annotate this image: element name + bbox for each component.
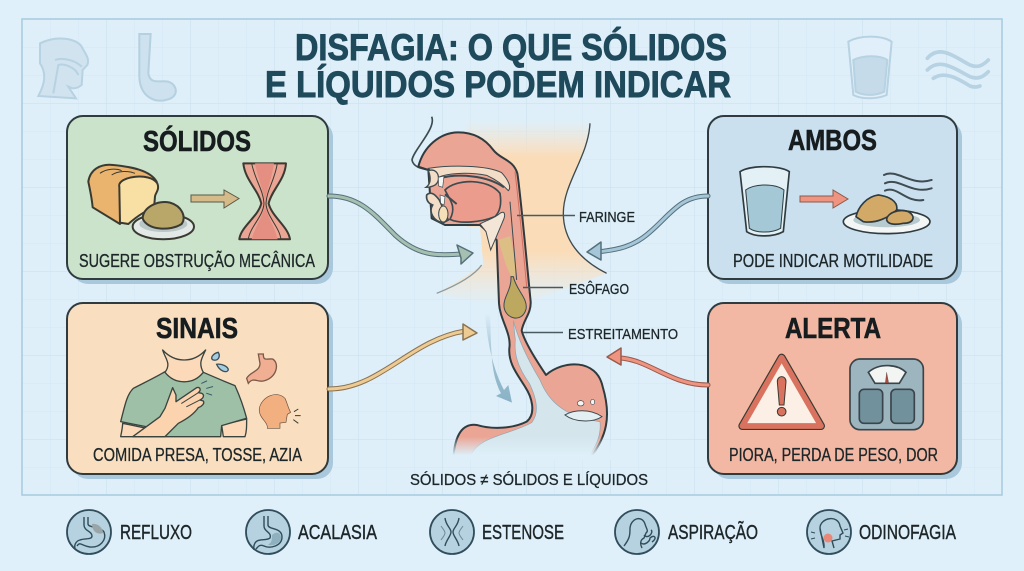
icon: person with hand on chest	[121, 350, 247, 437]
icon: coughing head	[259, 395, 301, 428]
icon: warning triangle	[742, 358, 821, 426]
icon: arrow	[800, 190, 848, 208]
icon: dilated stomach	[246, 510, 290, 554]
icon: narrowing	[239, 163, 290, 239]
bottom item: odinofagia	[807, 510, 957, 554]
heading: sinais: SINAIS	[156, 313, 238, 345]
bottom item: aspiração	[615, 510, 758, 554]
caption: alerta: PIORA, PERDA DE PESO, DOR	[729, 445, 938, 465]
leader line: esôfago	[523, 286, 563, 288]
label: aspiração: ASPIRAÇÃO	[668, 520, 758, 544]
icon: sweat drops	[212, 352, 228, 372]
stomach liquid surface	[565, 411, 602, 421]
bottom item: acalasia	[246, 510, 378, 554]
heading: sólidos: SÓLIDOS	[143, 124, 251, 158]
arrow: sinais to esophagus	[329, 324, 477, 389]
leader line: faringe	[517, 214, 575, 216]
icon: head with aspiration	[615, 510, 659, 554]
upper lip	[426, 170, 438, 187]
icon: glass of water	[740, 167, 789, 236]
anatomy illustration	[412, 117, 617, 460]
tongue	[445, 182, 501, 222]
title: E LÍQUIDOS PODEM INDICAR	[265, 64, 731, 105]
icon: head with painful throat	[807, 510, 851, 554]
icon: odor waves	[884, 173, 932, 200]
label: estenose: ESTENOSE	[482, 522, 564, 544]
title	[265, 26, 731, 105]
decorative icon: waves	[927, 52, 988, 87]
icon: plate with food	[843, 195, 930, 234]
icon: stomach with reflux	[67, 510, 111, 554]
label: acalasia: ACALASIA	[298, 522, 378, 544]
palate	[428, 166, 510, 191]
title: DISFAGIA: O QUE SÓLIDOS	[295, 26, 727, 68]
label: esôfago: ESÔFAGO	[569, 281, 629, 298]
icon: stomach	[247, 354, 276, 383]
arrow: alerta to esophagus	[607, 348, 708, 385]
icon: bread	[88, 165, 158, 224]
label: odinofagia: ODINOFAGIA	[859, 522, 957, 544]
caption: sinais: COMIDA PRESA, TOSSE, AZIA	[93, 445, 302, 465]
lips and chin	[427, 193, 448, 223]
teeth	[438, 176, 445, 205]
heading: alerta: ALERTA	[785, 313, 881, 345]
decorative icon: head profile	[38, 39, 88, 98]
decorative icon: glass of water	[848, 37, 892, 98]
icon: plate with food	[133, 202, 194, 239]
bottom item: estenose	[430, 510, 564, 554]
panel: sinais	[67, 303, 333, 479]
tube: pharynx, esophagus and stomach	[418, 132, 607, 458]
caption: sólidos vs sólidos e líquidos: SÓLIDOS ≠ SÓLIDOS E LÍQUIDOS	[410, 470, 648, 489]
label: estreitamento: ESTREITAMENTO	[568, 326, 678, 343]
arrow: ambos to esophagus	[587, 196, 708, 260]
caption: ambos: PODE INDICAR MOTILIDADE	[733, 251, 933, 271]
decorative icon: esophagus and stomach	[139, 34, 176, 101]
caption: sólidos: SUGERE OBSTRUÇÃO MECÂNICA	[79, 250, 315, 271]
leader line: estreitamento	[523, 332, 563, 334]
lower digestive liquid	[470, 321, 600, 458]
arrow: liquid flow downward	[485, 313, 512, 403]
bottom item: refluxo	[67, 510, 192, 554]
panel: sólidos	[67, 116, 333, 284]
icon: arrow	[191, 190, 239, 208]
heading: ambos: AMBOS	[788, 125, 877, 157]
panel: ambos	[708, 116, 962, 284]
label: refluxo: REFLUXO	[120, 522, 192, 544]
arrow: sólidos to esophagus	[329, 196, 473, 264]
icon: stenosis	[430, 510, 474, 554]
label: faringe: FARINGE	[579, 209, 635, 226]
food bolus	[504, 277, 526, 318]
epiglottis	[480, 212, 505, 250]
panel: alerta	[708, 303, 962, 479]
icon: weighing scale	[850, 359, 923, 430]
swallowed food	[498, 236, 517, 282]
